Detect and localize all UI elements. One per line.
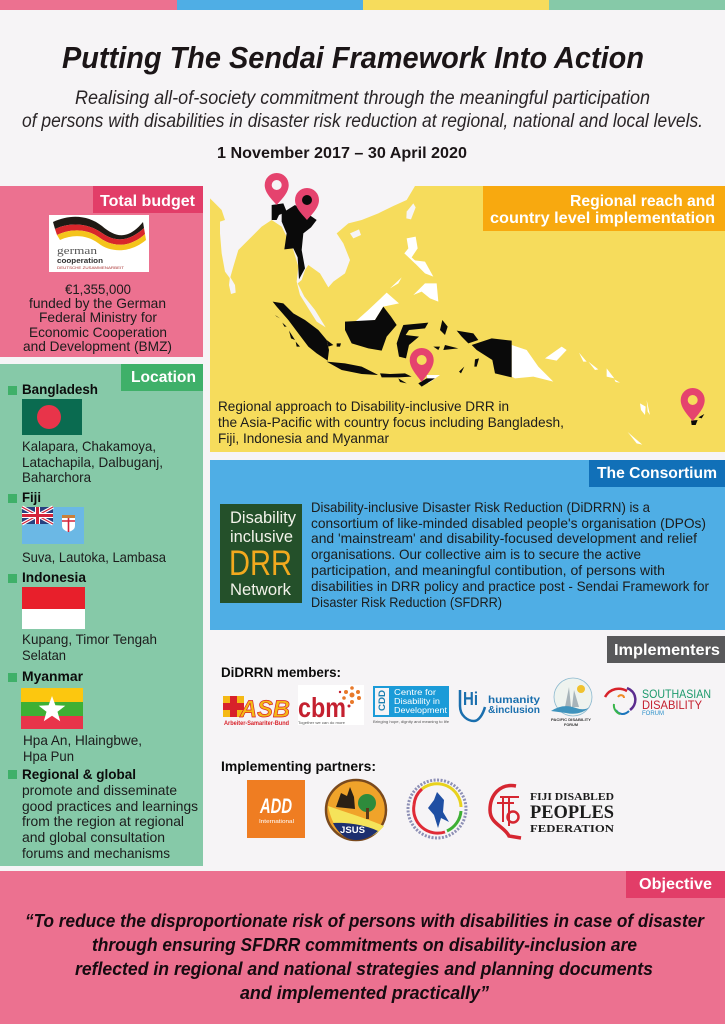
consortium description: Disability-inclusive Disaster Risk Reduction (DiDRRN) is a — [311, 499, 650, 515]
heading: implementers — [607, 636, 725, 663]
objective quote — [25, 911, 705, 1003]
heading: DiDRRN members: DiDRRN members: — [221, 664, 341, 680]
logo: South Asian Disability Forum — [605, 687, 711, 717]
consortium description: consortium of like-minded disabled people's organisation (DPOs) — [311, 515, 706, 531]
consortium description: disabilities in DRR policy and practice post - Sendai Framework for — [311, 578, 709, 594]
logo: Myanmar Independent Living Initiative — [408, 780, 466, 838]
panel: total budget — [0, 186, 203, 357]
panel: the consortium — [210, 460, 725, 630]
logo: DRR Network: DRR — [229, 544, 292, 583]
map caption: Fiji, Indonesia and Myanmar — [218, 430, 389, 446]
logo: South Asian Disability Forum: DISABILITY — [642, 698, 702, 712]
logo: german cooperation: DEUTSCHE ZUSAMMENARBEIT — [57, 266, 125, 270]
map caption — [218, 398, 564, 446]
heading: the consortium — [589, 460, 725, 487]
location: regional and global: Regional & global — [22, 766, 136, 782]
logo: CDD: CDD — [377, 689, 387, 711]
heading: objective — [626, 871, 725, 898]
icon: location pins — [265, 173, 705, 421]
logo: cbm — [298, 685, 364, 725]
heading: implementing partners: Implementing partners: — [221, 758, 376, 774]
title: Putting The Sendai Framework Into Action — [62, 40, 644, 75]
logo: Fiji Disabled Peoples Federation: PEOPLES — [530, 802, 614, 823]
location: Indonesia — [8, 569, 157, 663]
logo: ASB: Arbeiter-Samariter-Bund — [224, 721, 289, 727]
location: Myanmar — [8, 668, 142, 764]
heading: implementers: Implementers — [614, 642, 720, 659]
logo: DRR Network: Network — [230, 580, 291, 599]
subtitle — [22, 88, 703, 132]
location: regional and global: promote and disseminate — [22, 782, 177, 798]
logo: Pacific Disability Forum: FORUM — [564, 722, 579, 727]
map caption: the Asia-Pacific with country focus including Bangladesh, — [218, 414, 564, 430]
location: Myanmar: Myanmar — [22, 668, 84, 684]
heading: total budget: Total budget — [100, 193, 195, 210]
location: regional and global — [8, 766, 198, 861]
heading: objective: Objective — [639, 876, 712, 893]
logo: CDD: Centre for — [394, 688, 436, 697]
logo: humanity and inclusion: &inclusion — [488, 705, 540, 716]
logo: CDD: Bringing hope, dignity and meaning to life — [373, 719, 450, 724]
logo: ASB — [223, 696, 290, 727]
heading: regional reach: country level implementation — [490, 210, 715, 227]
logo: JSUS: JSUS — [340, 825, 365, 835]
panel: location — [0, 364, 203, 866]
location: regional and global: forums and mechanisms — [22, 845, 170, 861]
logo: South Asian Disability Forum: SOUTHASIAN — [642, 687, 711, 701]
objective quote: reflected in regional and national strategies and planning documents — [75, 959, 653, 979]
consortium description — [311, 499, 709, 610]
map of South-East Asia and Pacific — [210, 186, 704, 445]
logo: german cooperation: cooperation — [57, 258, 103, 265]
flag: Indonesia — [22, 587, 85, 629]
logos: implementing partners — [247, 780, 614, 840]
heading: regional reach: Regional reach and — [570, 193, 715, 210]
logo: humanity and inclusion: Hi — [463, 689, 478, 709]
logo: german cooperation — [49, 215, 149, 272]
heading: location — [121, 364, 203, 391]
location: regional and global: from the region at regional — [22, 813, 184, 829]
logo: DRR Network: inclusive — [230, 527, 293, 546]
logo: JSUS — [326, 780, 386, 840]
location: Bangladesh: Latachapila, Dalbuganj, — [22, 454, 163, 470]
objective quote: “To reduce the disproportionate risk of persons with disabilities in case of disaster — [25, 911, 705, 931]
location: Fiji — [8, 489, 166, 565]
location: Indonesia: Selatan — [22, 647, 66, 663]
logo: CDD: Development — [394, 706, 448, 715]
map caption: Regional approach to Disability-inclusive DRR in — [218, 398, 509, 414]
flag: Fiji — [22, 507, 84, 544]
heading: location: Location — [131, 369, 196, 386]
location: Fiji: Fiji — [22, 489, 41, 505]
budget text: Federal Ministry for — [39, 309, 157, 325]
consortium description: and 'mainstream' and disability-focused development and relief — [311, 530, 697, 546]
heading: total budget — [93, 186, 203, 213]
logo: Fiji Disabled Peoples Federation — [490, 786, 614, 838]
objective quote: and implemented practically” — [240, 983, 489, 1003]
consortium description: Disaster Risk Reduction (SFDRR) — [311, 594, 502, 610]
logo: DRR Network — [220, 504, 302, 603]
location: Indonesia: Indonesia — [22, 569, 86, 585]
location: Indonesia: Kupang, Timor Tengah — [22, 631, 157, 647]
location: Myanmar: Hpa Pun — [23, 748, 74, 764]
panel: regional map — [210, 173, 725, 452]
objective quote: through ensuring SFDRR commitments on disability-inclusion are — [92, 935, 637, 955]
logo: Pacific Disability Forum — [551, 678, 592, 727]
logo: cbm: cbm — [298, 692, 346, 723]
consortium description: organisations. Our collective aim is to secure the active — [311, 546, 641, 562]
logos: DiDRRN members — [223, 678, 711, 727]
project dates: 1 November 2017 – 30 April 2020 — [217, 145, 467, 162]
location: Bangladesh: Kalapara, Chakamoya, — [22, 438, 156, 454]
budget text: Economic Cooperation — [29, 324, 167, 340]
heading: the consortium: The Consortium — [597, 465, 717, 482]
location: Bangladesh — [8, 381, 163, 485]
heading: regional reach — [483, 186, 725, 231]
logo: Fiji Disabled Peoples Federation: FIJI DISABLED — [530, 791, 614, 803]
logo: ADD International: ADD — [259, 795, 292, 818]
budget text — [23, 281, 172, 354]
flag: Myanmar — [21, 688, 83, 729]
budget text: funded by the German — [29, 295, 166, 311]
location: Myanmar: Hpa An, Hlaingbwe, — [23, 732, 142, 748]
subtitle: Realising all-of-society commitment through the meaningful participation — [75, 88, 650, 109]
location: Bangladesh: Bangladesh — [22, 381, 98, 397]
location: Bangladesh: Baharchora — [22, 469, 91, 485]
budget text: €1,355,000 — [65, 281, 131, 297]
consortium description: participation, and meaningful contibution, of persons with — [311, 562, 665, 578]
location: regional and global: and global consultation — [22, 829, 165, 845]
logo: cbm: Together we can do more — [298, 721, 345, 725]
logo: ADD International — [247, 780, 305, 838]
location: Fiji: Suva, Lautoka, Lambasa — [22, 549, 166, 565]
logo: CDD: Disability in — [394, 697, 440, 706]
logo: humanity and inclusion — [460, 689, 541, 721]
logo: South Asian Disability Forum: FORUM — [642, 711, 664, 717]
logo: DRR Network: Disability — [230, 508, 296, 527]
logo: german cooperation: german — [57, 245, 98, 257]
flag: Bangladesh — [22, 399, 82, 435]
panel: objective — [0, 871, 725, 1024]
logo: Pacific Disability Forum: PACIFIC DISABILITY — [551, 717, 591, 722]
logo: humanity and inclusion: humanity — [488, 695, 541, 706]
budget text: and Development (BMZ) — [23, 338, 172, 354]
top colour bar — [0, 0, 725, 10]
logo: ASB: ASB — [239, 696, 290, 723]
location: regional and global: good practices and learnings — [22, 798, 198, 814]
logo: Fiji Disabled Peoples Federation: FEDERATION — [530, 823, 614, 835]
logo: CDD — [373, 686, 450, 724]
logo: ADD International: International — [259, 819, 294, 825]
